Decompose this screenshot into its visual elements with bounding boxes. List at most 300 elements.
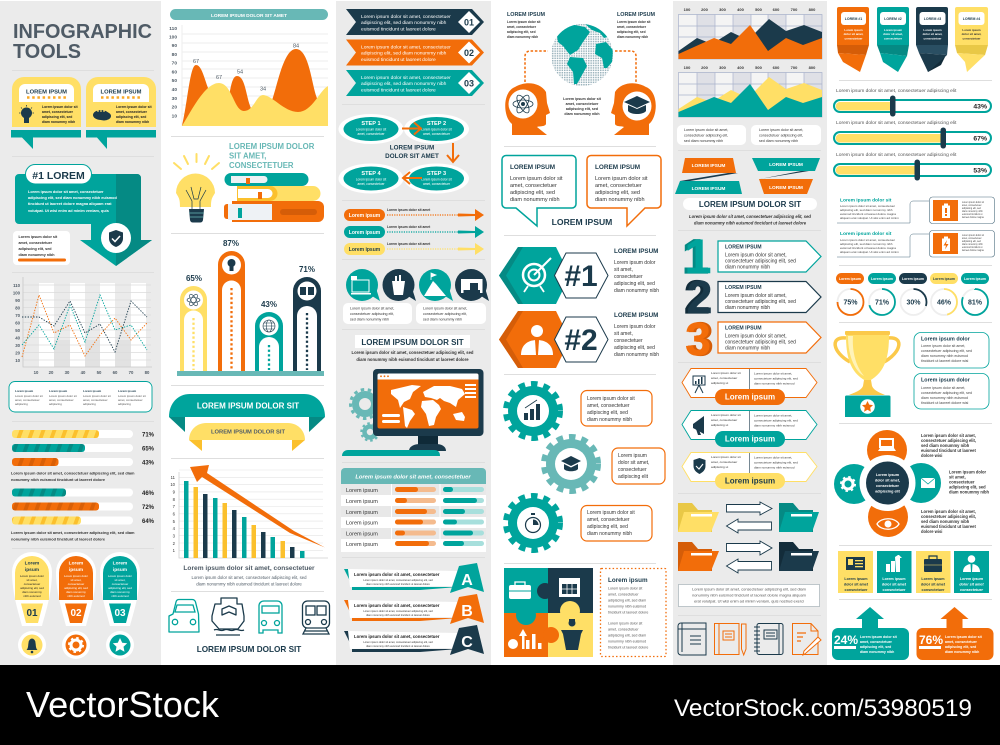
- tag 4: dolor sit amet,: [962, 32, 982, 36]
- table panel: Lorem ipsum dolor sit amet, consectetuer: [355, 474, 471, 480]
- folded banner right: [752, 158, 820, 194]
- text: flower bottom note: Lorem ipsum dolor sit amet,: [921, 509, 976, 514]
- text box: gear two: adipiscing elit: [618, 474, 649, 480]
- tile: growth bars: Lorem ipsum: [882, 577, 906, 581]
- drop marker 01: Lorem: [25, 560, 39, 566]
- dotted text panel: nonummy nibh euismod: [608, 640, 646, 644]
- area chart: 50: [172, 78, 177, 84]
- speech icon row: [346, 269, 489, 301]
- area chart: navy and orange: 200: [701, 7, 709, 12]
- callout: battery warning: aliquam erat volutpat. Ut wisi enim ad minim: [840, 216, 899, 220]
- slider 53%: [834, 152, 991, 180]
- panel: yellow note card one: amet, consectetuer: [42, 110, 74, 114]
- legend pills: Lorem ipsum: [839, 277, 861, 281]
- text: bar chart caption: diam nonummy nibh euismod tincidunt ut laoreet dolore: [196, 582, 302, 586]
- legend pills: Lorem ipsum: [902, 277, 924, 281]
- text note with orange underline: diam nonummy nibh: [18, 253, 55, 257]
- text: globe right column: adipiscing elit, sed: [617, 30, 646, 34]
- numbered row 2: consectetuer adipiscing elit, sed: [725, 299, 796, 305]
- heading pill: area chart: LOREM IPSUM DOLOR SIT AMET: [211, 13, 287, 19]
- hexagon callout: orange: consectetuer adipiscing elit, sed: [754, 376, 798, 380]
- slider 43%: 43%: [973, 104, 987, 110]
- drop marker 01: 01: [26, 608, 38, 619]
- text: globe left column: amet, consectetuer: [507, 25, 537, 29]
- tile: growth bars: [877, 551, 912, 593]
- panel: yellow note card two: [86, 77, 156, 149]
- drop marker 01: [12, 552, 52, 626]
- area chart: [169, 25, 328, 126]
- area chart: 84: [293, 44, 299, 50]
- icon: light bulb: [174, 154, 219, 223]
- tag 2: [877, 7, 909, 72]
- hexagon callout: yellow: Lorem ipsum: [725, 476, 775, 486]
- text box: trophy two: [914, 374, 989, 409]
- speech box: orange: [587, 156, 661, 226]
- area chart: yellow and teal: 500: [755, 65, 763, 70]
- dotted line chart: 80: [145, 370, 150, 375]
- callout: battery warning: Lorem ipsum dolor sit: [840, 198, 892, 204]
- title: INFOGRAPHIC: [13, 21, 152, 43]
- icon: stacked books: [224, 173, 324, 222]
- hexagon #1: #1: [564, 260, 598, 293]
- dotted line chart: 110: [13, 283, 21, 288]
- table panel: Lorem ipsum: [346, 510, 378, 516]
- bar chart with falling arrow: 2: [173, 541, 176, 546]
- numbered row 2: 2: [687, 271, 712, 323]
- callout: battery charge: Lorem ipsum dolor sit: [840, 231, 892, 237]
- hexagon callout: teal: Lorem ipsum: [725, 434, 775, 444]
- tile: person: consectetuer: [960, 588, 984, 592]
- numbered row 3: LOREM IPSUM: [725, 326, 762, 332]
- tag 4: Lorem ipsum: [962, 28, 981, 32]
- line chart legend box: Lorem ipsum: [49, 389, 68, 393]
- callout: battery charge: Lorem ipsum dolor sit: [962, 234, 984, 237]
- text cards under speech icons: Lorem ipsum dolor sit amet,: [423, 306, 467, 310]
- text box: gear one: adipiscing elit, sed: [587, 410, 628, 416]
- speech box: orange: diam nonummy nibh: [595, 197, 645, 203]
- text box: trophy one: diam nonummy nibh euismod: [921, 354, 968, 358]
- area chart: yellow and teal: 200: [701, 65, 709, 70]
- flower diagram: [834, 430, 941, 537]
- dotted text panel: tincidunt ut laoreet dolore: [608, 646, 648, 650]
- text cards under area charts: sed diam nonummy nibh: [684, 139, 723, 143]
- donut gauges: 46%: [937, 300, 952, 306]
- text: flower top note: [921, 433, 976, 458]
- dotted line chart: 100: [13, 290, 21, 296]
- text box: gear one: [581, 390, 652, 426]
- tag 1: LOREM #1: [845, 17, 862, 21]
- drop marker 01: diam nonummy: [22, 590, 42, 594]
- heading pill: area chart: [170, 9, 328, 20]
- area chart: navy and orange: 700: [791, 7, 798, 12]
- progress bars group one: Lorem ipsum dolor sit amet, consectetuer adipiscing elit, sed diam: [11, 470, 135, 476]
- dotted text box: nonummy nibh euismod tincidunt ut laoreet dolore magna aliquam: [692, 592, 806, 598]
- tile: person: dolor sit amet: [959, 582, 984, 586]
- panel: yellow note card one: [11, 77, 81, 149]
- stat card 24%: adipiscing elit, sed: [860, 645, 891, 649]
- stat card 76%: diam nonummy nibh: [945, 650, 979, 654]
- text note with orange underline: Lorem ipsum dolor sit: [18, 235, 58, 239]
- icon: bell: [18, 631, 46, 659]
- slider 43%: [834, 88, 991, 116]
- slider 53%: Lorem ipsum dolor sit amet, consectetuer adipiscing elit: [836, 152, 957, 158]
- bar chart with falling arrow: [170, 465, 328, 558]
- area chart: 10: [172, 114, 177, 120]
- panel: yellow note card two: adipiscing elit, sed: [116, 115, 146, 119]
- text: between heads: [563, 97, 602, 116]
- area chart: 60: [172, 70, 177, 76]
- table panel: Lorem ipsum: [346, 488, 378, 494]
- hexagon callout: yellow: consectetuer adipiscing elit, sed: [754, 460, 798, 464]
- progress bars group one: [11, 430, 155, 482]
- tile: briefcase: consectetuer: [922, 588, 945, 592]
- text: globe right column: amet, consectetuer: [617, 25, 647, 29]
- ribbon A: [344, 563, 484, 593]
- dotted text box: erat volutpat. Ut wisi enim ad minim veniam, quis nostrud exerci: [694, 598, 804, 604]
- callout: battery charge: adipiscing elit, sed: [962, 240, 981, 243]
- dashed connectors: [525, 51, 636, 83]
- hexagon callout: yellow: diam nonummy nibh euismod: [754, 466, 795, 470]
- dotted text panel: Lorem ipsum dolor sit: [608, 622, 642, 626]
- numbered row 2: 2: [684, 271, 710, 323]
- icon: car: [169, 600, 199, 632]
- ribbon A: diam nonummy nibh euismod tincidunt ut laoreet dolore: [366, 582, 430, 586]
- line chart legend box: adipiscing: [118, 402, 131, 406]
- drop marker 03: sit amet,: [115, 578, 126, 582]
- text: bar chart caption: Lorem ipsum dolor sit amet, consectetuer adipiscing elit, sed: [191, 575, 307, 580]
- callout: battery charge: diam nonummy nibh: [962, 244, 983, 246]
- ribbon C: Lorem ipsum dolor sit amet, consectetuer: [354, 634, 440, 639]
- text box: trophy one: Lorem ipsum dolor sit amet,: [921, 344, 965, 348]
- flow: four steps: amet, consectetuer: [357, 132, 385, 136]
- tag 4: LOREM #4: [963, 17, 980, 21]
- callout: battery charge: euismod tincidunt ut laoreet dolore magna: [840, 246, 896, 250]
- slider 67%: 67%: [973, 136, 987, 142]
- heading: light bulb: [229, 142, 315, 170]
- ribbon C: Lorem ipsum dolor sit amet, consectetuer adipiscing elit, sed: [363, 640, 433, 644]
- ribbon C: diam nonummy nibh euismod tincidunt ut laoreet dolore: [366, 644, 430, 648]
- dotted line chart: 50: [97, 370, 102, 375]
- table panel: Lorem ipsum: [346, 520, 378, 526]
- flow: four steps: Lorem ipsum dolor sit: [356, 178, 386, 182]
- hexagon #2: Lorem ipsum dolor: [614, 324, 656, 330]
- ribbon banner: yellow: LOREM IPSUM DOLOR SIT: [211, 430, 285, 436]
- line chart legend box: Lorem ipsum: [118, 389, 137, 393]
- text: flower right note: [949, 470, 990, 494]
- donut gauges: 71%: [875, 300, 890, 306]
- icon: ship: [212, 598, 244, 635]
- heading: monitor section: LOREM IPSUM DOLOR SIT: [361, 338, 464, 347]
- hexagon callout: orange: Lorem ipsum: [725, 392, 775, 402]
- timeline: orange pill arrow: [344, 208, 484, 221]
- panel: yellow note card two: diam nonummy nibh: [116, 120, 149, 124]
- text cards under area charts: Lorem ipsum dolor sit amet,: [759, 128, 803, 132]
- area chart: 67: [216, 75, 222, 81]
- text box: gear three: [581, 506, 652, 541]
- timeline: teal pill arrow: Lorem ipsum dolor sit amet: [387, 225, 431, 229]
- arrow banner 01: adipiscing elit, sed diam nonummy nibh: [361, 20, 447, 26]
- panel: #1 lorem arrow box: [15, 164, 152, 266]
- text box: gear two: Lorem ipsum: [618, 453, 647, 459]
- line chart legend box: adipiscing: [49, 402, 62, 406]
- title: TOOLS: [13, 41, 81, 63]
- tag 1: consectetuer: [844, 36, 863, 40]
- heading: light bulb: SIT AMET,: [229, 152, 266, 160]
- timeline: teal pill arrow: Lorem ipsum: [349, 230, 381, 236]
- text box: gear three: amet, consectetuer: [587, 517, 630, 523]
- text box: gear three: Lorem ipsum dolor sit: [587, 510, 635, 516]
- dotted line chart: 40: [15, 336, 21, 340]
- drop marker 02: consectetuer: [68, 582, 84, 586]
- drop marker 03: Lorem ipsum dolor: [108, 574, 132, 578]
- tag 3: [916, 7, 948, 72]
- icon: trophy: [835, 331, 899, 417]
- callout: battery charge: [837, 230, 994, 257]
- timeline: yellow pill arrow: Lorem ipsum: [349, 247, 381, 253]
- flower diagram: adipiscing elit: [875, 490, 901, 494]
- dotted text panel: tincidunt ut laoreet dolore: [608, 610, 648, 614]
- arrow banner 02: adipiscing elit, sed diam nonummy nibh: [361, 50, 447, 56]
- hexagon #1: adipiscing elit, sed: [614, 281, 655, 287]
- hexagon #1: LOREM IPSUM: [614, 248, 658, 255]
- flower diagram: Lorem ipsum: [876, 473, 900, 477]
- numbered row 2: diam nonummy nibh: [725, 305, 770, 311]
- bar chart with falling arrow: 11: [171, 475, 176, 480]
- drop marker 03: consectetuer: [112, 582, 128, 586]
- callout: battery warning: adipiscing elit, sed diam nonummy nibh: [840, 208, 893, 212]
- text note with orange underline: amet, consectetuer: [18, 241, 53, 245]
- progress bars group one: 71%: [142, 432, 155, 438]
- donut gauges: 81%: [968, 300, 983, 306]
- text: globe right column: diam nonummy nibh: [617, 35, 648, 39]
- tag 2: Lorem ipsum: [884, 28, 903, 32]
- arrow banner 01: euismod tincidunt ut laoreet dolore: [361, 26, 436, 32]
- progress bars group two: Lorem ipsum dolor sit amet, consectetuer adipiscing elit, sed diam: [11, 530, 135, 535]
- text box: trophy one: Lorem ipsum dolor: [921, 336, 971, 342]
- slider 53%: 53%: [973, 168, 987, 174]
- dotted line chart: 70: [129, 370, 134, 375]
- hexagon callout: teal: amet, consectetuer: [711, 418, 737, 422]
- ribbon B: Lorem ipsum dolor sit amet, consectetuer adipiscing elit, sed: [363, 609, 433, 613]
- area chart: 80: [172, 52, 177, 58]
- icon: head with graduation cap: [611, 83, 656, 135]
- drop marker 01: adipiscing elit, sed: [20, 586, 44, 590]
- line chart legend box: Lorem ipsum dolor sit: [83, 394, 111, 398]
- hexagon #2: [499, 311, 659, 368]
- numbered row 3: 3: [688, 313, 713, 365]
- ribbon banner: teal: [169, 394, 325, 432]
- panel: yellow note card two: amet, consectetuer: [116, 110, 148, 114]
- table panel: Lorem ipsum: [346, 542, 378, 548]
- arrow banner 01: 01: [464, 18, 474, 28]
- ribbon banner: teal: LOREM IPSUM DOLOR SIT: [197, 402, 299, 410]
- donut gauges: 75%: [843, 300, 858, 306]
- numbered row 3: consectetuer adipiscing elit, sed: [725, 340, 796, 346]
- line chart legend box: amet, consectetuer: [15, 398, 40, 402]
- arrow banner 02: Lorem ipsum dolor sit amet, consectetuer: [361, 44, 451, 50]
- line chart legend box: Lorem ipsum: [15, 389, 34, 393]
- flow: four steps: amet, consectetuer: [357, 182, 385, 186]
- arrow banner 03: [346, 70, 484, 96]
- heading: speech boxes: LOREM IPSUM: [552, 217, 612, 227]
- icon: star badge: [106, 631, 134, 659]
- drop marker 01: nibh euismod: [23, 594, 41, 598]
- slider 67%: [834, 120, 991, 148]
- footer bar: VectorStock.com/53980519: [674, 695, 972, 722]
- ribbon A: Lorem ipsum dolor sit amet, consectetuer: [354, 572, 440, 577]
- text: globe left column: Lorem ipsum dolor sit: [507, 20, 541, 24]
- title: [13, 21, 152, 63]
- flow: four steps: STEP 2: [427, 121, 446, 127]
- arrow banner 02: [346, 40, 484, 66]
- hexagon callout: orange: amet, consectetuer: [711, 376, 737, 380]
- ribbon banner: yellow: [189, 423, 305, 451]
- text: globe left column: diam nonummy nibh: [507, 35, 538, 39]
- hexagon #2: #2: [564, 324, 598, 357]
- area chart: 67: [193, 59, 199, 65]
- arrow banner 03: adipiscing elit, sed diam nonummy nibh: [361, 81, 447, 87]
- text: flower bottom note: consectetuer adipiscing elit,: [921, 514, 976, 519]
- tag 3: Lorem ipsum: [923, 28, 942, 32]
- panel: yellow note card two: Lorem ipsum dolor sit: [116, 105, 152, 109]
- panel: yellow note card one: Lorem ipsum dolor sit: [42, 105, 78, 109]
- numbered row 1: 1: [685, 231, 711, 284]
- dotted text panel: amet, consectetuer: [608, 628, 639, 632]
- area chart: navy and orange: 600: [773, 7, 780, 12]
- tag 2: dolor sit amet,: [883, 32, 903, 36]
- ribbon C: [344, 625, 484, 655]
- hexagon callout: orange: [682, 368, 817, 405]
- gear: bar chart: [506, 384, 560, 438]
- text cards under speech icons: sed diam nonummy nibh: [423, 318, 462, 322]
- area chart: navy and orange: 500: [755, 7, 763, 12]
- tile: person: [954, 551, 989, 593]
- numbered row 1: consectetuer adipiscing elit, sed: [725, 258, 796, 264]
- heading pill with subtext: LOREM IPSUM DOLOR SIT: [699, 200, 801, 209]
- icon: monitor with world map: [342, 369, 484, 456]
- stat card 76%: Lorem ipsum dolor sit: [945, 635, 983, 639]
- numbered row 3: 3: [685, 313, 711, 365]
- folded banner left: [675, 158, 742, 194]
- drop marker 03: nibh euismod: [111, 594, 129, 598]
- dotted text panel: Lorem ipsum: [608, 577, 648, 584]
- icon: orange folder: [678, 542, 719, 571]
- stat card 24%: diam nonummy nibh: [860, 650, 894, 654]
- text: flower bottom note: [921, 509, 976, 534]
- tile: briefcase: [916, 551, 950, 593]
- donut gauges: [838, 289, 988, 315]
- hexagon callout: orange: Lorem ipsum dolor sit amet,: [754, 372, 792, 376]
- timeline: teal pill arrow: [344, 225, 484, 238]
- stat card 24%: amet, consectetuer: [860, 640, 893, 644]
- area chart: 34: [260, 86, 266, 92]
- hexagon callout: teal: adipiscing ut: [711, 423, 728, 427]
- pill chart: 71%: [299, 265, 315, 274]
- dotted line chart: 80: [15, 306, 21, 310]
- ribbon B: B: [461, 603, 473, 620]
- flow: four steps: amet, consectetuer: [423, 132, 451, 136]
- area chart: yellow and teal: 300: [719, 65, 727, 70]
- flow: four steps: Lorem ipsum dolor sit: [421, 178, 452, 182]
- tile: id card: [838, 551, 873, 593]
- text: flower top note: sed diam nonummy nibh: [921, 443, 970, 448]
- heading: monitor section: Lorem ipsum dolor sit amet, consectetuer adipiscing elit, sed: [352, 350, 474, 355]
- speech box: teal: [502, 156, 576, 226]
- text cards under area charts: consectetuer adipiscing elit,: [759, 134, 803, 138]
- line chart legend box: amet, consectetuer: [49, 398, 74, 402]
- text: globe right column: [617, 12, 656, 39]
- text: between heads: amet, consectetuer: [566, 102, 599, 106]
- text box: gear one: Lorem ipsum dolor sit: [587, 396, 635, 402]
- area chart: navy and orange: 800: [809, 7, 816, 12]
- drop marker 03: [100, 552, 140, 626]
- callout: battery warning: [837, 197, 994, 224]
- area chart: yellow and teal: 100: [684, 65, 691, 70]
- dotted text panel: adipiscing elit, sed diam: [608, 598, 646, 602]
- line chart legend box: Lorem ipsum dolor sit: [118, 394, 146, 398]
- speech box: orange: amet, consectetuer: [595, 183, 642, 189]
- tile: briefcase: Lorem ipsum: [921, 577, 945, 581]
- area chart: 30: [172, 96, 177, 102]
- text box: gear one: diam nonummy nibh: [587, 417, 632, 423]
- drop marker 01: consectetuer: [24, 582, 40, 586]
- line chart legend box: amet, consectetuer: [83, 398, 108, 402]
- slider 67%: Lorem ipsum dolor sit amet, consectetuer adipiscing elit: [836, 120, 957, 126]
- dotted line chart: 10: [34, 370, 39, 375]
- heading: light bulb: LOREM IPSUM DOLOR: [229, 142, 315, 151]
- text: flower top note: euismod tincidunt ut laoreet: [921, 448, 976, 453]
- footer bar: [0, 665, 1000, 745]
- ribbon B: Lorem ipsum dolor sit amet, consectetuer: [354, 603, 440, 608]
- progress bars group two: nonummy nibh euismod tincidunt ut laoreet dolore: [11, 536, 106, 542]
- text box: gear two: consectetuer: [618, 467, 647, 473]
- text cards under area charts: consectetuer adipiscing elit,: [684, 134, 728, 138]
- tag 1: dolor sit amet,: [844, 32, 864, 36]
- text box: trophy two: Lorem ipsum dolor: [921, 378, 971, 384]
- drop marker 03: adipiscing elit, sed: [108, 586, 132, 590]
- drop marker 03: ipsum: [113, 567, 127, 573]
- pill chart: [177, 239, 324, 376]
- text note with orange underline: [13, 231, 70, 265]
- tile: growth bars: consectetuer: [883, 588, 906, 592]
- drop marker 02: 02: [70, 608, 82, 619]
- callout: battery warning: amet, consectetuer: [962, 204, 982, 207]
- hexagon callout: teal: Lorem ipsum dolor sit: [711, 413, 741, 417]
- callout: battery warning: Lorem ipsum dolor sit: [962, 201, 984, 204]
- dotted text panel: nonummy nibh euismod: [608, 604, 646, 608]
- text cards under area charts: Lorem ipsum dolor sit amet,: [684, 128, 728, 132]
- arrow banner 03: 03: [464, 78, 474, 88]
- icon: page with pencil: [792, 624, 821, 655]
- slider 43%: Lorem ipsum dolor sit amet, consectetuer adipiscing elit: [836, 88, 957, 94]
- drop marker 02: [56, 552, 96, 626]
- drop marker 02: ipsum: [69, 567, 83, 573]
- progress bars group one: nonummy nibh euismod tincidunt ut laoreet dolore: [11, 477, 106, 482]
- numbered row 2: LOREM IPSUM: [725, 285, 762, 291]
- timeline: orange pill arrow: Lorem ipsum: [349, 213, 381, 219]
- bar chart with falling arrow: 6: [173, 512, 176, 516]
- ribbon A: Lorem ipsum dolor sit amet, consectetuer adipiscing elit, sed: [363, 578, 433, 582]
- area chart: 100: [169, 34, 177, 40]
- dotted text panel: adipiscing elit, sed diam: [608, 634, 646, 638]
- hexagon #2: adipiscing elit, sed: [614, 345, 655, 351]
- panel: #1 lorem arrow box: adipiscing elit, sed diam nonummy nibh euismod: [28, 196, 117, 200]
- timeline: orange pill arrow: Lorem ipsum dolor sit amet: [387, 208, 431, 212]
- legend pills: Lorem ipsum: [871, 277, 893, 281]
- drop marker 03: 03: [114, 608, 126, 619]
- ribbon C: C: [461, 634, 473, 651]
- table panel: Lorem ipsum: [346, 499, 378, 505]
